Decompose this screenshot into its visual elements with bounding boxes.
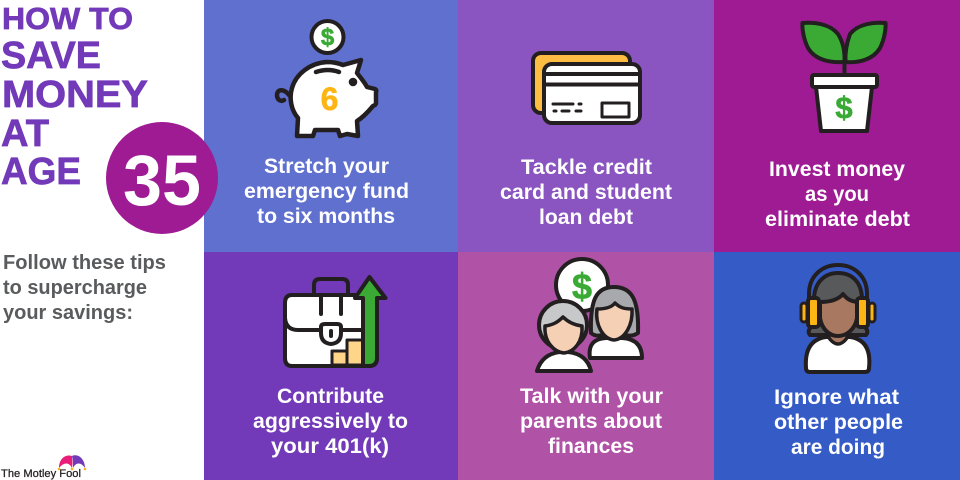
icon: briefcase with growth arrow	[285, 277, 386, 366]
text: invest money	[765, 158, 910, 231]
text: ignore other people: are doing	[791, 436, 885, 459]
text: tackle credit card debt: loan debt	[539, 206, 633, 229]
panel: emergency fund	[204, 0, 458, 252]
text: follow these tips	[3, 252, 166, 324]
text: talk with parents: finances	[548, 435, 634, 458]
text: contribute aggressively	[253, 385, 408, 458]
text: contribute aggressively: aggressively to	[253, 410, 408, 433]
icon: piggy bank with coin: $	[321, 24, 335, 51]
panel: credit card debt	[458, 0, 714, 252]
icon: piggy bank with coin: 6	[321, 81, 338, 117]
text: tackle credit card debt: card and student	[500, 181, 672, 204]
title: AGE	[1, 151, 81, 193]
icon: plant in pot: $	[835, 90, 853, 125]
icon: person with headphones	[801, 265, 875, 372]
text: follow these tips: Follow these tips	[3, 252, 166, 274]
text: ignore other people: other people	[774, 411, 903, 434]
text: ignore other people: Ignore what	[774, 386, 899, 409]
icon: credit cards	[533, 53, 640, 123]
panel: talk with parents	[458, 252, 714, 480]
title: MONEY	[2, 74, 148, 116]
text: talk with parents: Talk with your	[520, 385, 663, 408]
panel: contribute to 401k	[204, 252, 458, 480]
icon: parents with dollar bubble	[537, 259, 642, 371]
age badge: 35	[123, 142, 201, 221]
text: talk with parents	[520, 385, 663, 458]
icon: parents with dollar bubble: $	[572, 266, 592, 307]
text: stretch your emergency fund: emergency fund	[244, 180, 409, 203]
text: talk with parents: parents about	[520, 410, 662, 433]
text: invest money: Invest money	[769, 158, 905, 181]
text: invest money: as you	[805, 183, 869, 206]
icon: plant in pot	[802, 23, 886, 131]
text: contribute aggressively: Contribute	[277, 385, 384, 408]
text: invest money: eliminate debt	[765, 208, 910, 231]
title: HOW TO	[2, 1, 133, 36]
logo: The Motley Fool: The Motley Fool	[1, 468, 81, 480]
text: follow these tips: to supercharge	[3, 277, 147, 299]
title	[1, 1, 148, 193]
text: tackle credit card debt	[500, 156, 672, 229]
text: stretch your emergency fund: to six months	[257, 205, 395, 228]
logo: The Motley Fool	[1, 455, 86, 480]
text: stretch your emergency fund	[244, 155, 409, 228]
text: follow these tips: your savings:	[3, 302, 133, 324]
icon: piggy bank with coin	[277, 21, 376, 136]
age badge	[106, 122, 218, 234]
text: tackle credit card debt: Tackle credit	[521, 156, 652, 179]
panel: invest money	[714, 0, 960, 252]
text: stretch your emergency fund: Stretch your	[264, 155, 389, 178]
title: SAVE	[1, 35, 101, 77]
text: contribute aggressively: your 401(k)	[271, 435, 389, 458]
text: ignore other people	[774, 386, 903, 459]
panel: ignore other people	[714, 252, 960, 480]
title: AT	[1, 113, 49, 155]
